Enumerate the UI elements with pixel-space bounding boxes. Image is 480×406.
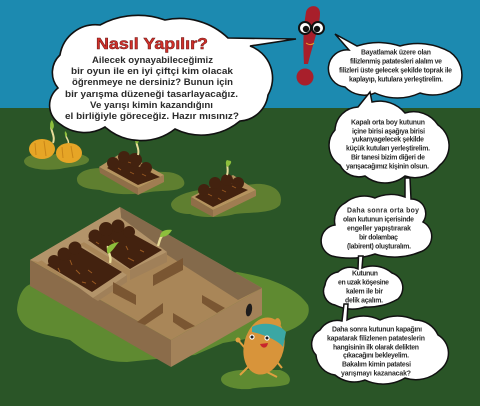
main speech bubble (50, 15, 296, 141)
step 4 text: kalem ile bir (346, 288, 383, 296)
step 4 bubble (324, 256, 403, 309)
step 1 text: Bayatlamak üzere olan (361, 50, 431, 56)
sprout 1 (107, 242, 119, 263)
intro text: Ve yarışı kimin kazandığını (90, 100, 213, 110)
step 3 text: bir dolambaç (359, 234, 398, 242)
step 2 bubble (329, 92, 449, 183)
inner small box 2 (77, 217, 167, 280)
maze wall b (153, 258, 183, 286)
step 5 text: yarışmayı kazanacak? (341, 370, 411, 378)
step 1 text: kaplayıp, kutulara yerleştirelim. (349, 76, 443, 84)
step 1 text (339, 50, 452, 84)
step 2 text: Kapalı orta boy kutunun (351, 120, 425, 126)
sprout 2 (158, 230, 172, 246)
maze wall d (173, 313, 195, 330)
maze box (30, 207, 262, 367)
intro text: öğrenmeye ne dersiniz? Bunun için (72, 77, 233, 87)
step 1 text: filizleri üste gelecek şekilde toprak ile (339, 68, 452, 74)
maze wall a (113, 282, 136, 305)
grass blob under box (17, 272, 309, 362)
step 4 text: en uzak köşesine (338, 280, 389, 286)
grass blob under first soil box (77, 168, 184, 194)
step 5 bubble (312, 304, 448, 384)
grass background (0, 108, 480, 406)
step 2 text: içine birisi aşağıya birisi (352, 128, 425, 136)
step 1 bubble (328, 34, 462, 98)
grass blob under potatoes (24, 152, 89, 170)
step 2 text: küçük kutuları yerleştirelim. (346, 146, 430, 152)
intro text: bir yarışma düzeneği tasarlayacağız. (65, 89, 238, 99)
soil box 2 (191, 160, 256, 217)
intro text: bir oyun ile en iyi çiftçi kim olacak (71, 66, 234, 76)
maze wall e (202, 295, 225, 313)
potato runner (236, 313, 290, 379)
step 3 bubble (321, 178, 432, 258)
step 5 text: hangisinin ilk olarak delikten (333, 344, 419, 352)
step 2 text: yarışacağımız kişinin olsun. (346, 164, 429, 170)
maze wall c (137, 303, 163, 325)
title: Nasıl Yapılır? (96, 36, 208, 53)
intro text: el birliğiyle göreceğiz. Hazır mısınız? (65, 111, 239, 121)
step 2 text (346, 120, 430, 170)
step 4 text: Kutunun (352, 270, 378, 278)
step 3 text: engeller yapıştırarak (347, 226, 411, 232)
step 3 text: olan kutunun içerisinde (343, 216, 414, 224)
step 5 text: kapatarak filizlenen patateslerin (327, 336, 425, 342)
step 5 text (327, 326, 425, 378)
step 4 text: delik açalım. (345, 298, 383, 304)
step 3 text (343, 208, 419, 250)
intro text: Ailecek oynayabileceğimiz (92, 55, 214, 65)
step 5 text: Bakalım kimin patatesi (342, 362, 411, 368)
step 1 text: filizlenmiş patatesleri alalım ve (350, 58, 442, 66)
exit hole (245, 303, 253, 317)
step 2 text: yukarıyagelecek şekilde (352, 136, 424, 144)
step 4 text (338, 270, 389, 304)
step 5 text: çıkacağını bekleyelim. (343, 352, 409, 360)
step 3 text: (labirent) oluşturalım. (347, 244, 411, 250)
step 3 text: Daha sonra orta boy (347, 208, 419, 214)
grass blob under runner (221, 370, 290, 389)
sprouted potatoes (29, 120, 82, 163)
grass blob under second soil box (171, 184, 281, 217)
soil box 1 (99, 137, 164, 195)
intro text (65, 55, 239, 121)
sky background (0, 0, 480, 109)
inner small box 1 (37, 240, 127, 301)
exclamation mark character (296, 6, 324, 85)
step 2 text: Bir tanesi bizim diğeri de (351, 154, 425, 162)
step 5 text: Daha sonra kutunun kapağını (332, 326, 422, 334)
